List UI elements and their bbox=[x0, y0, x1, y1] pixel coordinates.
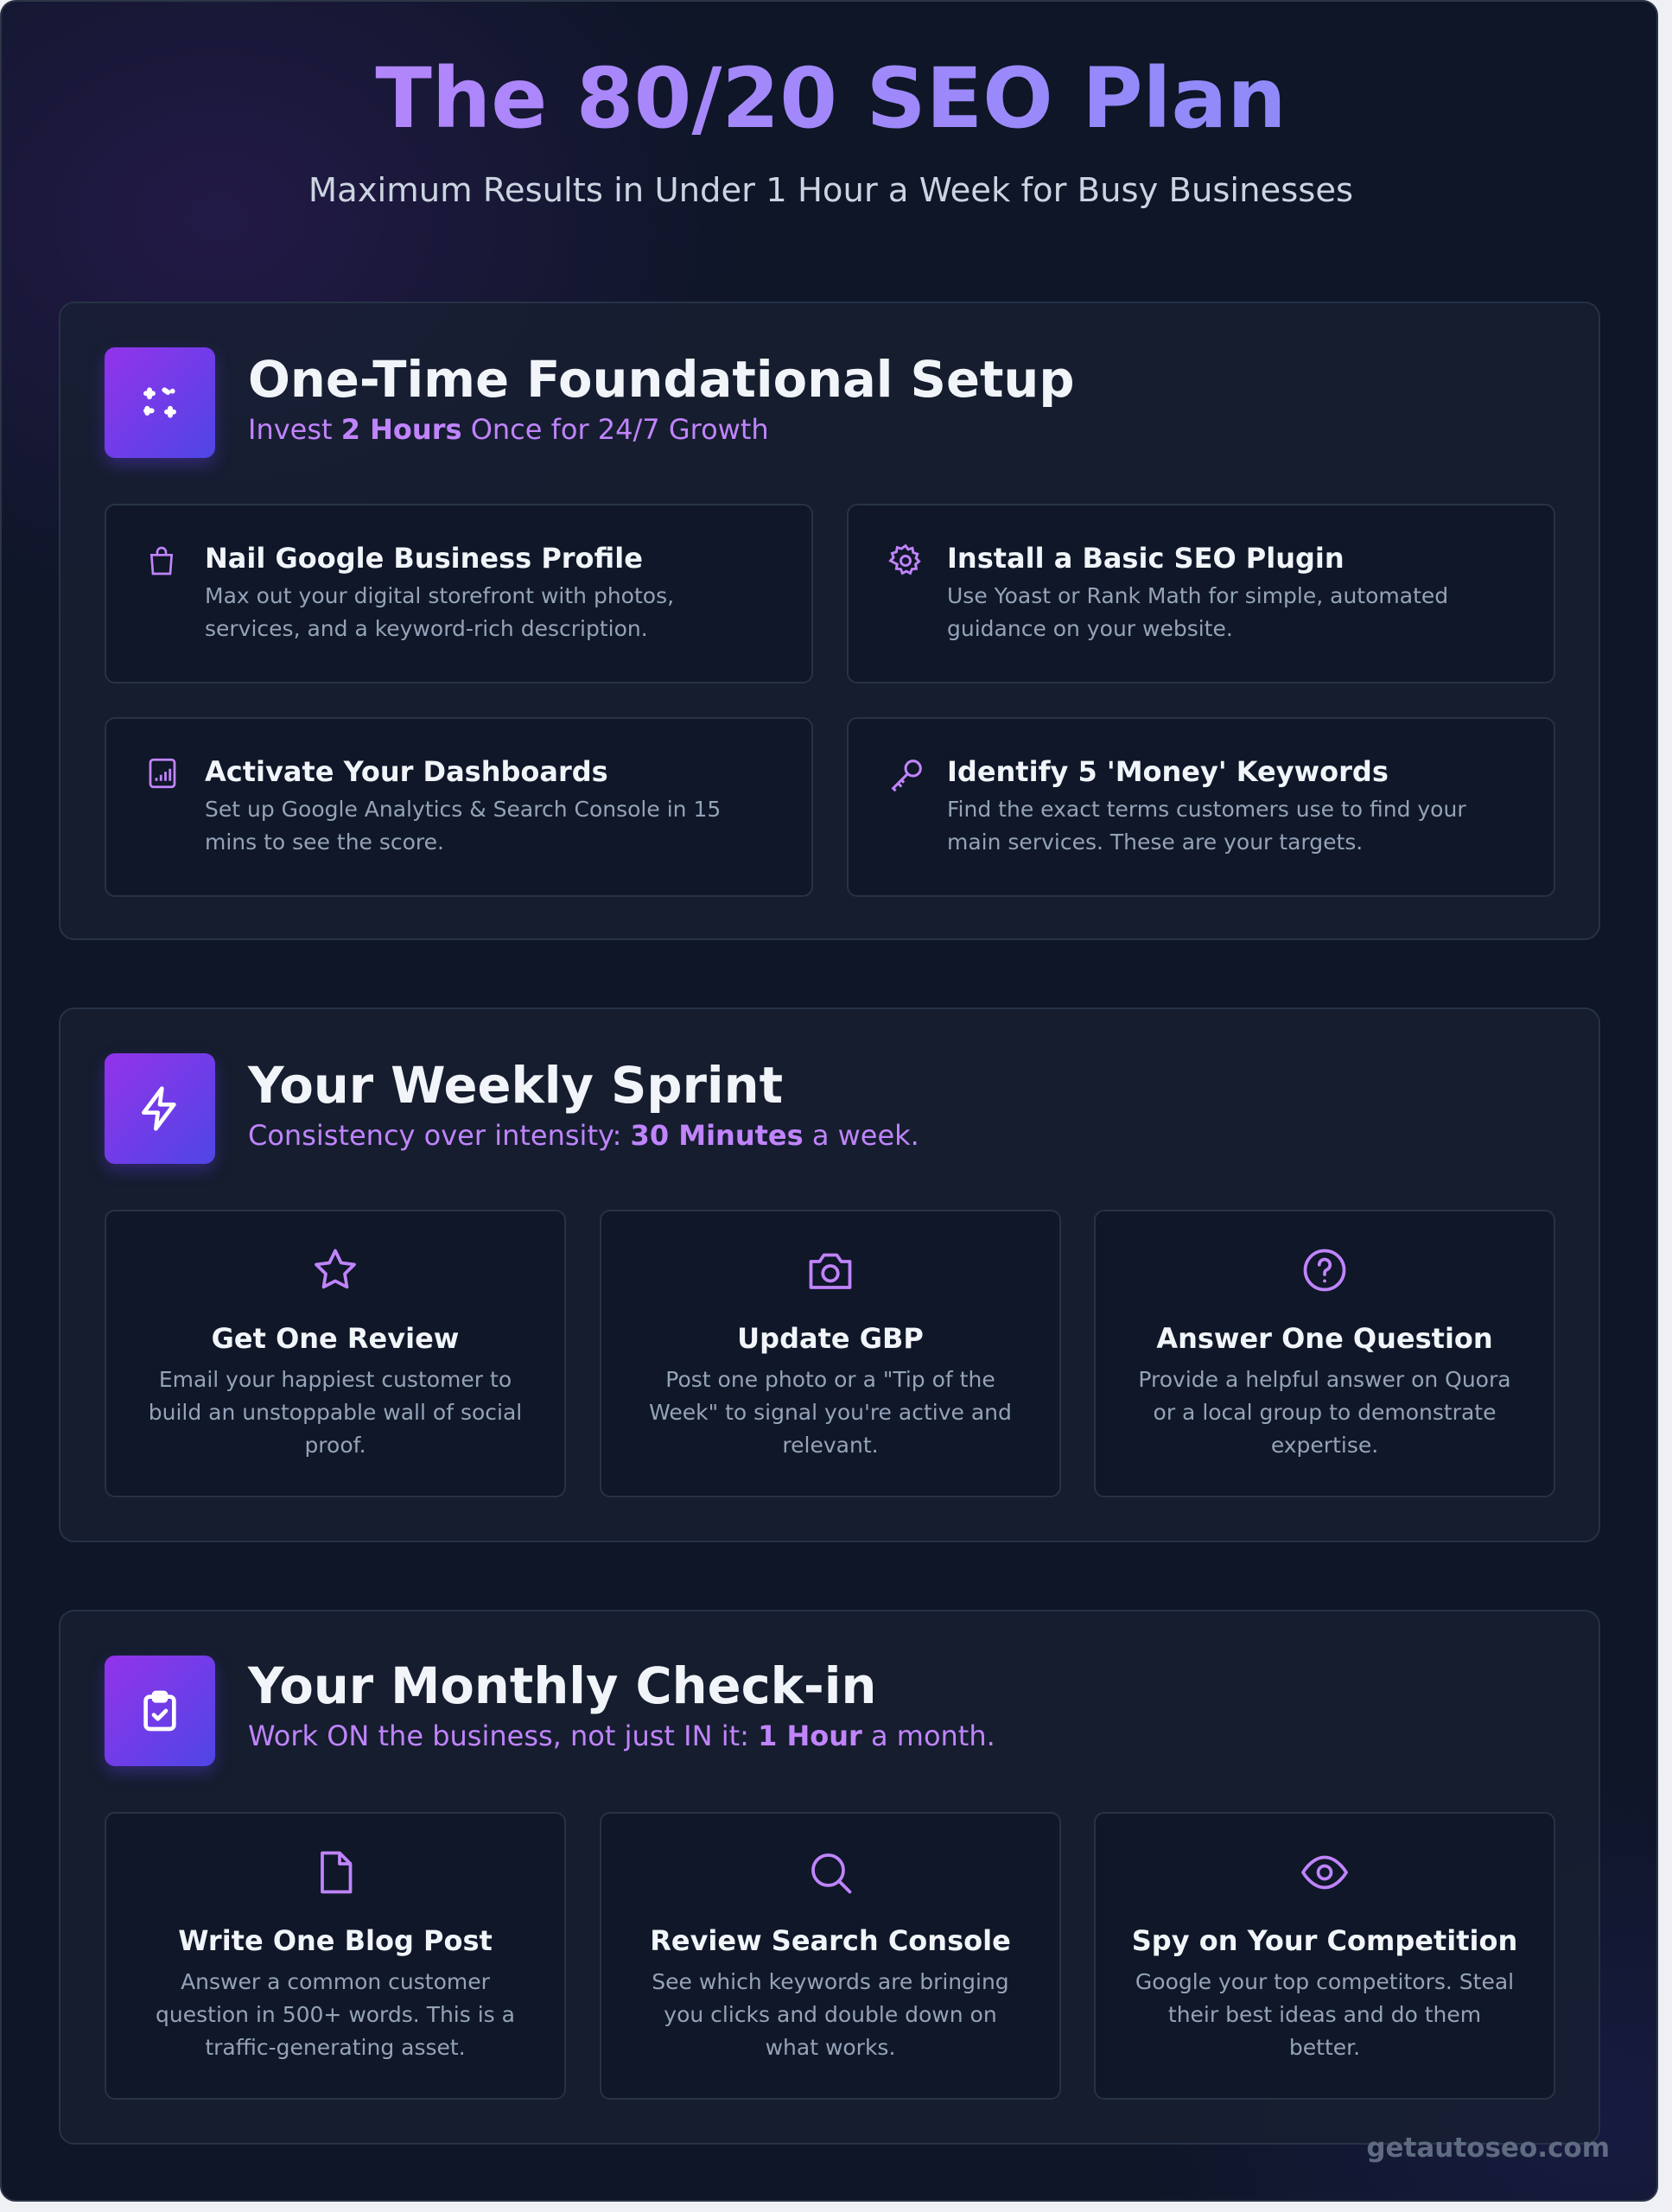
card: google business profile: Max out your digital storefront with photos, bbox=[205, 583, 674, 608]
card: answer one question bbox=[1094, 1210, 1555, 1497]
card: competition bbox=[1094, 1812, 1555, 2100]
heading: Your Weekly Sprint bbox=[248, 1057, 783, 1115]
title bbox=[2, 47, 1660, 150]
card: dashboards bbox=[105, 717, 813, 897]
icon: lightning bbox=[105, 1053, 215, 1164]
footer: website: getautoseo.com bbox=[1366, 2133, 1610, 2164]
card: get one review: build an unstoppable wall of social bbox=[149, 1400, 522, 1425]
panel: weekly sprint bbox=[59, 1007, 1600, 1542]
subheading: Work ON the business, not just IN it: 1 Hour a month. bbox=[248, 1719, 995, 1752]
icon: clipboard check bbox=[105, 1656, 215, 1766]
card: answer one question: Answer One Question bbox=[1156, 1322, 1493, 1355]
card: blog post: traffic-generating asset. bbox=[205, 2035, 466, 2060]
card: seo plugin: Install a Basic SEO Plugin bbox=[947, 542, 1345, 575]
card: google business profile: Nail Google Business Profile bbox=[205, 542, 643, 575]
card: answer one question: or a local group to demonstrate bbox=[1154, 1400, 1496, 1425]
card: search console: what works. bbox=[766, 2035, 895, 2060]
card: dashboards: Activate Your Dashboards bbox=[205, 755, 608, 788]
card: get one review bbox=[105, 1210, 566, 1497]
card: update gbp: Week" to signal you're active and bbox=[649, 1400, 1012, 1425]
card: update gbp: Update GBP bbox=[737, 1322, 924, 1355]
card: answer one question: Provide a helpful answer on Quora bbox=[1138, 1367, 1511, 1392]
card: get one review: Email your happiest customer to bbox=[159, 1367, 512, 1392]
card: money keywords: main services. These are your targets. bbox=[947, 830, 1363, 855]
card: money keywords: Identify 5 'Money' Keywords bbox=[947, 755, 1389, 788]
card: seo plugin: Use Yoast or Rank Math for simple, automated bbox=[947, 583, 1448, 608]
card: competition: better. bbox=[1289, 2035, 1360, 2060]
card: search console: you clicks and double down on bbox=[664, 2002, 997, 2027]
card: dashboards: Set up Google Analytics & Search Console in 15 bbox=[205, 797, 721, 822]
panel: monthly check-in bbox=[59, 1610, 1600, 2145]
card: answer one question: expertise. bbox=[1271, 1433, 1378, 1458]
card: blog post: question in 500+ words. This is a bbox=[156, 2002, 515, 2027]
card: competition: Google your top competitors. Steal bbox=[1135, 1969, 1514, 1994]
card: get one review: proof. bbox=[304, 1433, 366, 1458]
card: search console: See which keywords are bringing bbox=[652, 1969, 1009, 1994]
icon: sparkle setup bbox=[105, 347, 215, 458]
card: get one review: Get One Review bbox=[212, 1322, 459, 1355]
card: google business profile bbox=[105, 504, 813, 683]
subheading: Consistency over intensity: 30 Minutes a week. bbox=[248, 1119, 919, 1152]
card: update gbp: Post one photo or a "Tip of the bbox=[665, 1367, 995, 1392]
card: blog post: Write One Blog Post bbox=[178, 1924, 493, 1957]
heading: One-Time Foundational Setup bbox=[248, 351, 1075, 409]
card: competition: Spy on Your Competition bbox=[1132, 1924, 1517, 1957]
card: money keywords bbox=[847, 717, 1555, 897]
card: update gbp: relevant. bbox=[782, 1433, 879, 1458]
card: competition: their best ideas and do them bbox=[1168, 2002, 1481, 2027]
card: search console bbox=[600, 1812, 1061, 2100]
card: update gbp bbox=[600, 1210, 1061, 1497]
subheading: Invest 2 Hours Once for 24/7 Growth bbox=[248, 413, 769, 446]
card: search console: Review Search Console bbox=[650, 1924, 1011, 1957]
card: money keywords: Find the exact terms customers use to find your bbox=[947, 797, 1466, 822]
card: google business profile: services, and a keyword-rich description. bbox=[205, 616, 648, 641]
card: dashboards: mins to see the score. bbox=[205, 830, 444, 855]
panel: one-time foundational setup bbox=[59, 302, 1600, 940]
heading: Your Monthly Check-in bbox=[248, 1657, 876, 1715]
card: seo plugin bbox=[847, 504, 1555, 683]
title: The 80/20 SEO Plan bbox=[375, 50, 1287, 147]
card: blog post: Answer a common customer bbox=[181, 1969, 490, 1994]
card: seo plugin: guidance on your website. bbox=[947, 616, 1233, 641]
subtitle: Maximum Results in Under 1 Hour a Week for Busy Businesses bbox=[308, 171, 1353, 210]
card: blog post bbox=[105, 1812, 566, 2100]
